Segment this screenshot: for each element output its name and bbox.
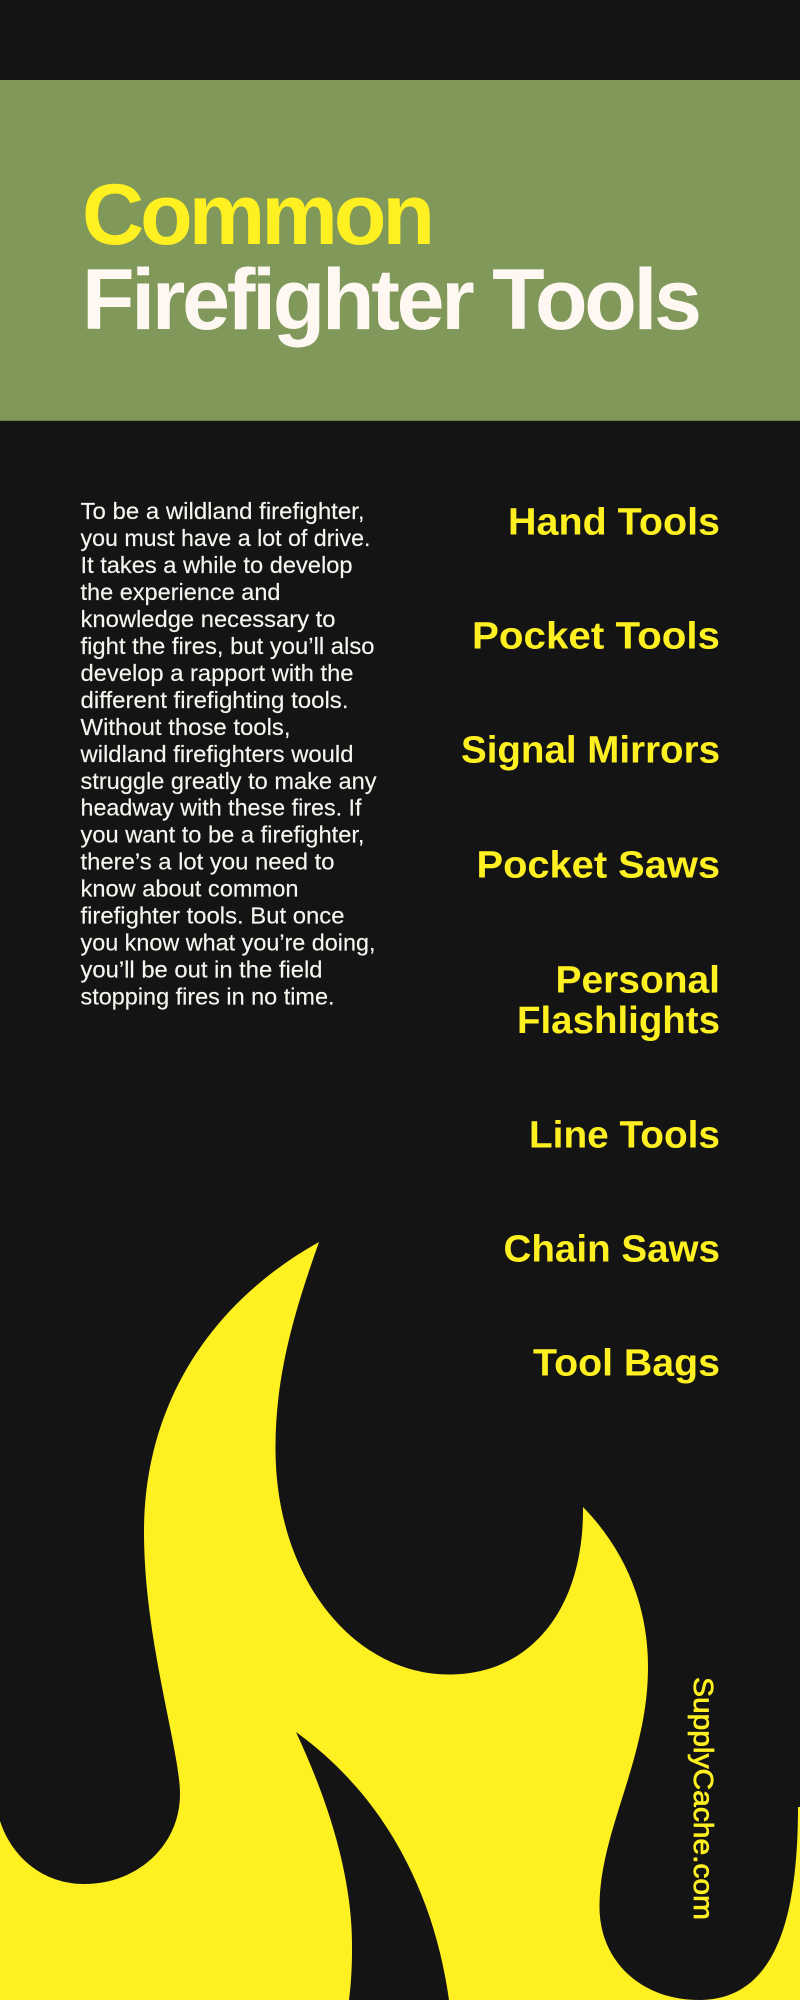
list item: Line Tools: Line Tools [529, 1114, 720, 1156]
title [82, 167, 702, 348]
intro paragraph: wildland firefighters would [79, 741, 354, 767]
list item: Tool Bags: Tool Bags [533, 1342, 720, 1384]
list item: Chain Saws: Chain Saws [504, 1228, 720, 1270]
intro paragraph: the experience and [80, 579, 280, 605]
intro paragraph: struggle greatly to make any [80, 768, 377, 794]
intro paragraph: you’ll be out in the field [80, 956, 322, 982]
intro paragraph: To be a wildland firefighter, [80, 498, 364, 524]
list item: Pocket Saws: Pocket Saws [476, 844, 720, 886]
list of tools [461, 502, 720, 1384]
title line: Firefighter Tools: Firefighter Tools [82, 252, 702, 348]
intro paragraph: It takes a while to develop [80, 552, 352, 578]
intro paragraph: there’s a lot you need to [80, 849, 334, 875]
list item: Signal Mirrors: Signal Mirrors [461, 730, 720, 772]
intro paragraph: you must have a lot of drive. [80, 525, 370, 551]
intro paragraph: fight the fires, but you’ll also [80, 633, 374, 659]
intro paragraph: headway with these fires. If [80, 795, 362, 821]
list item: Pocket Tools: Pocket Tools [472, 616, 720, 658]
intro paragraph [79, 498, 377, 1010]
title line: Common: Common [82, 167, 435, 263]
intro paragraph: stopping fires in no time. [80, 984, 334, 1010]
intro paragraph: knowledge necessary to [80, 606, 336, 632]
flame illustration [0, 1242, 800, 2000]
list item: Personal Flashlights: Flashlights [517, 1000, 720, 1042]
intro paragraph: know about common [80, 876, 298, 902]
intro paragraph: Without those tools, [80, 714, 290, 740]
intro paragraph: develop a rapport with the [80, 660, 354, 686]
list item: Personal Flashlights: Personal [556, 960, 720, 1002]
list item: Personal Flashlights [517, 960, 720, 1042]
intro paragraph: different firefighting tools. [80, 687, 348, 713]
panel: green title banner [0, 80, 800, 421]
intro paragraph: you want to be a firefighter, [80, 822, 364, 848]
list item: Hand Tools: Hand Tools [508, 502, 720, 544]
intro paragraph: you know what you’re doing, [80, 930, 376, 956]
intro paragraph: firefighter tools. But once [80, 903, 344, 929]
website label rotated: SupplyCache.com [688, 1677, 719, 1920]
